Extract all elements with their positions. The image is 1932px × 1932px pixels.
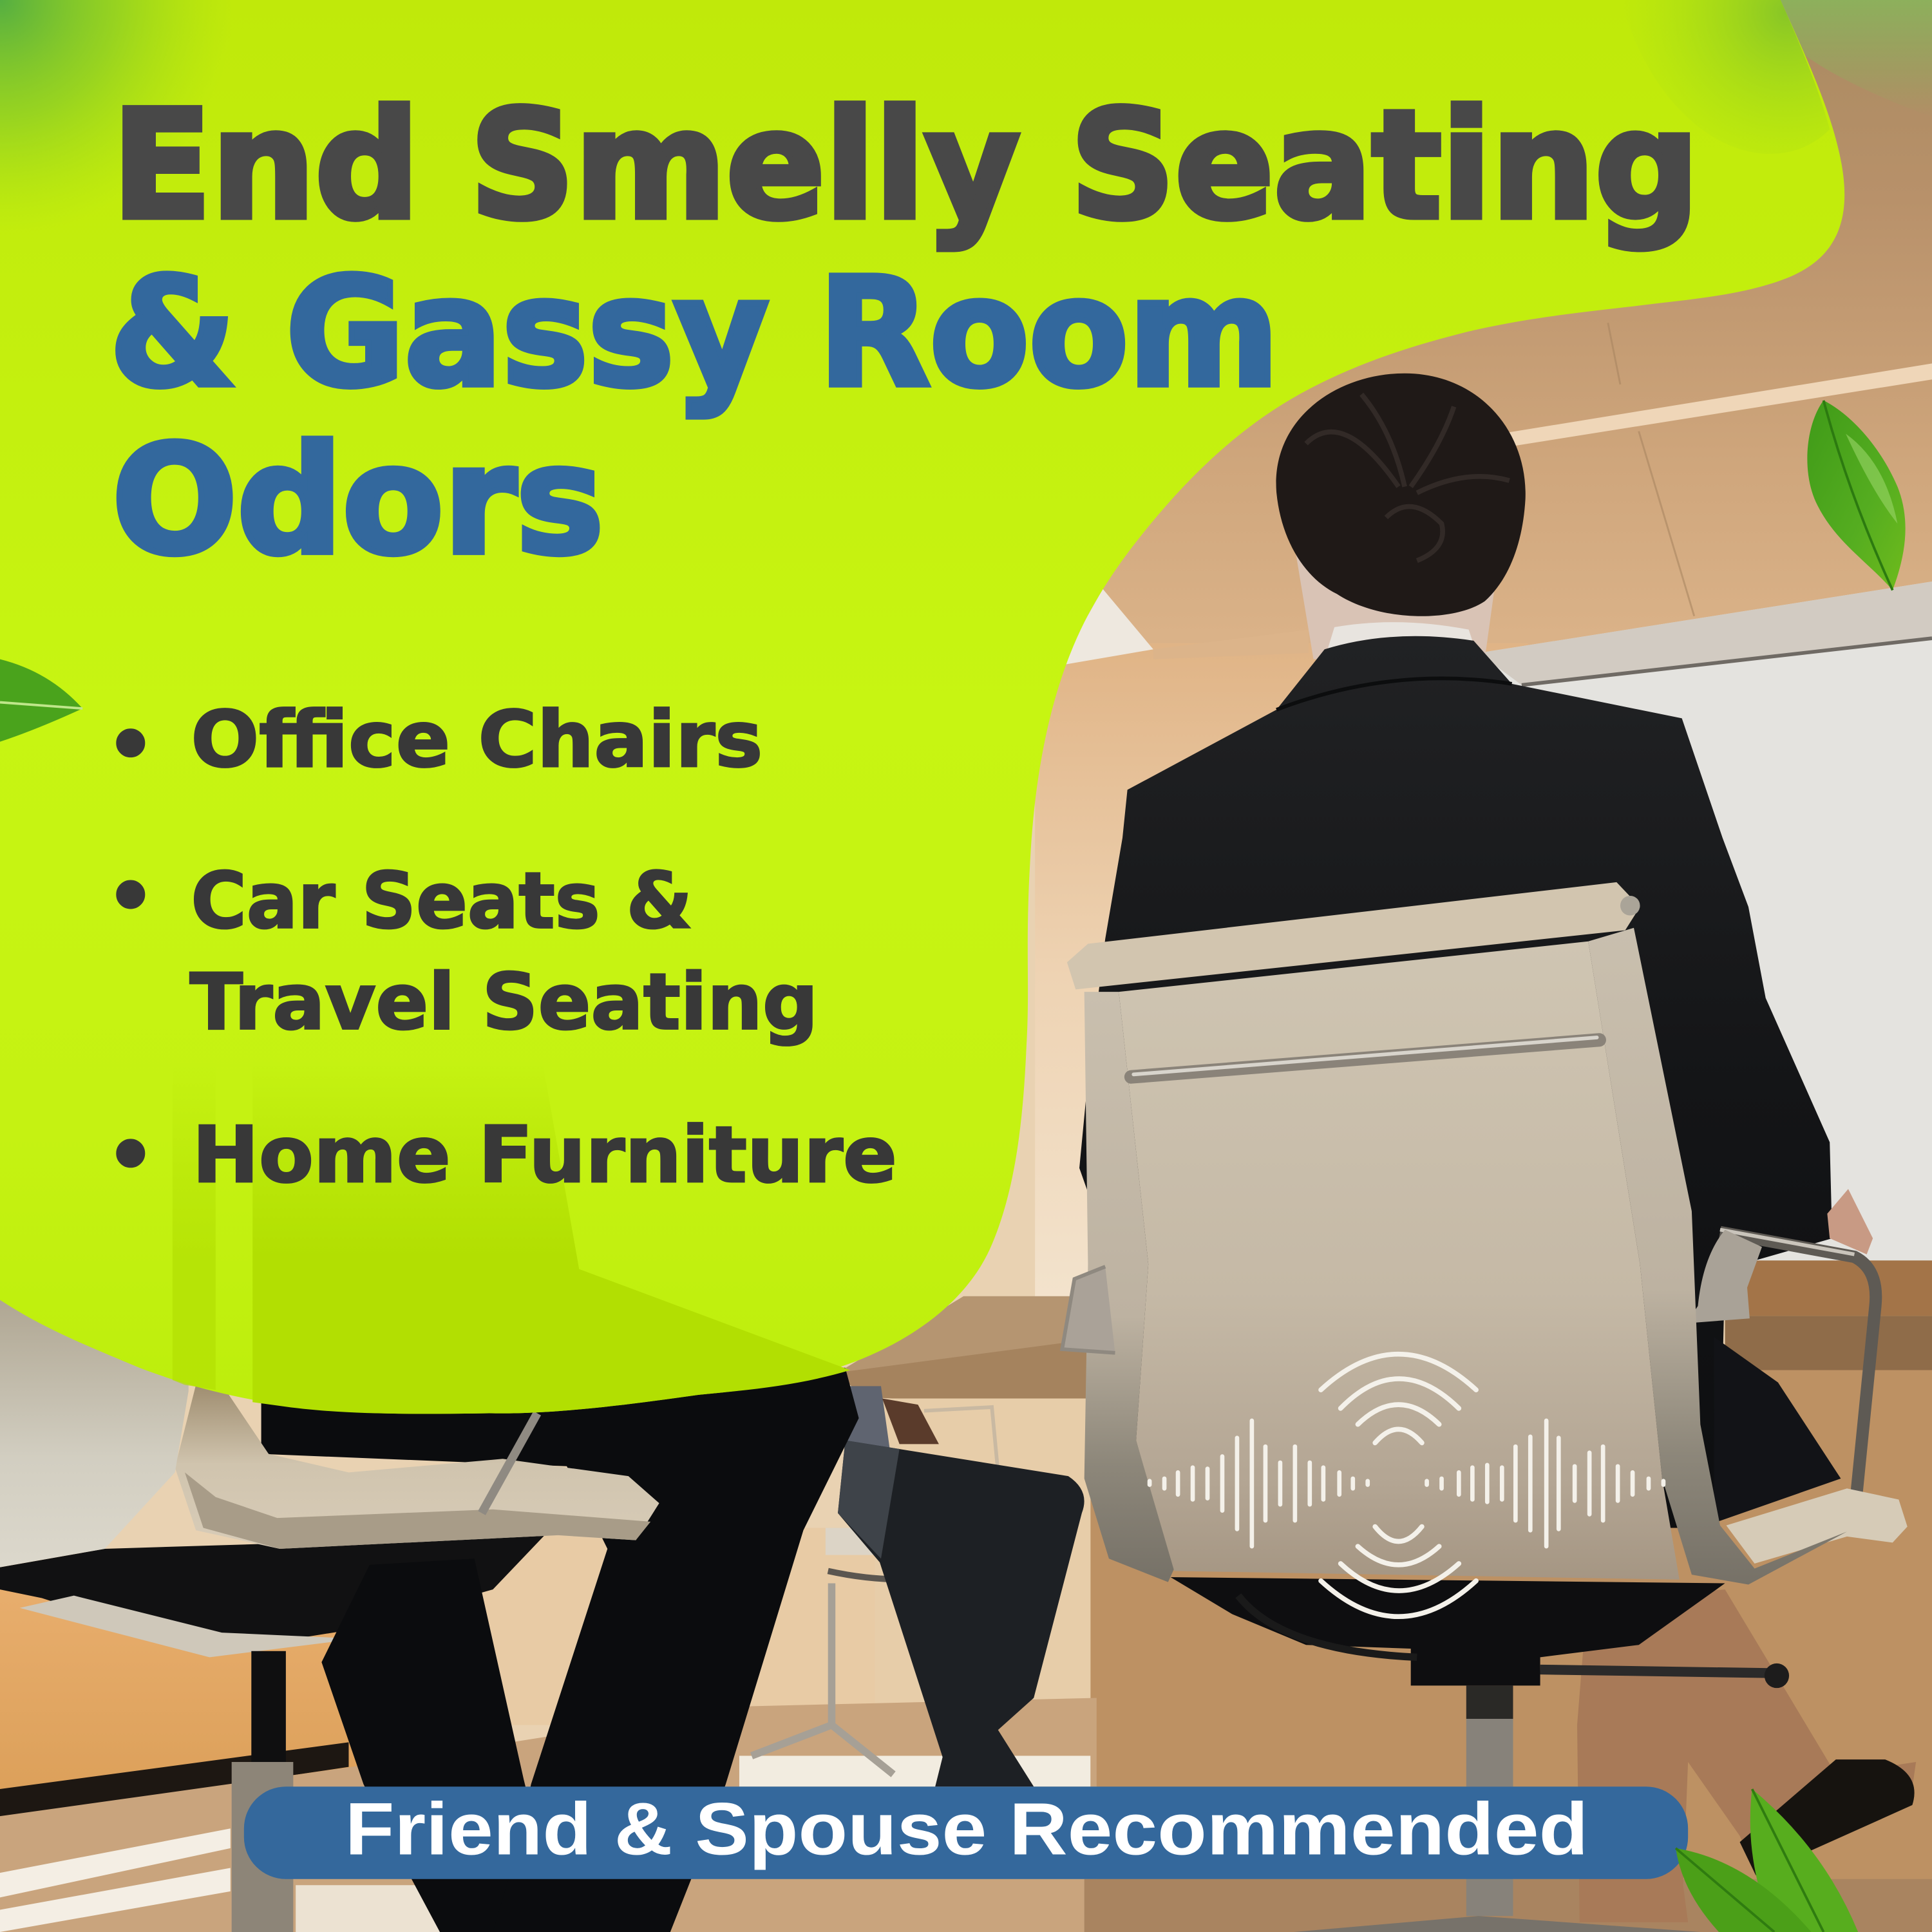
bulleted list: Home Furniture <box>192 1110 897 1200</box>
ghost silhouettes inside blob <box>252 1059 850 1414</box>
icon: leaves bottom right <box>1676 1789 1858 1932</box>
woman's collar <box>1325 622 1479 659</box>
bulleted list: Travel Seating <box>190 958 818 1048</box>
chair stem <box>1466 1685 1513 1719</box>
corner glow top left <box>0 0 234 234</box>
banner: Friend & Spouse Recommended: Friend & Spouse Recommended <box>345 1788 1588 1870</box>
left chair seat <box>175 1380 659 1549</box>
person's left leg <box>321 1558 554 1932</box>
title: & Gassy Room <box>109 246 1279 420</box>
office chair in foreground right <box>1062 882 1908 1932</box>
chair mechanism <box>1171 1577 1725 1685</box>
background seated man <box>752 1386 1084 1786</box>
lime green blob panel <box>0 0 1844 1414</box>
left chair back <box>0 1294 189 1567</box>
chair left frame <box>1084 992 1174 1582</box>
chair rod <box>482 1414 537 1513</box>
woman's jacket <box>1079 636 1832 1528</box>
person's right leg and torso <box>261 1368 859 1932</box>
right armrest <box>1720 1232 1876 1515</box>
woman's neck and ear <box>1293 533 1496 659</box>
chair right frame <box>1588 928 1847 1584</box>
chair metal cross bar <box>1131 1040 1599 1077</box>
chair top bar <box>1067 882 1640 989</box>
under-chair mechanism <box>0 1535 545 1653</box>
foreground left chair and seated legs <box>0 1294 859 1932</box>
bulleted list: Office Chairs <box>191 695 762 785</box>
chair seat <box>1726 1488 1908 1564</box>
woman's hand <box>1827 1189 1873 1255</box>
bulleted list: Car Seats & <box>191 857 692 947</box>
icon: leaf left edge <box>0 659 82 742</box>
woman's skirt <box>1714 1337 1841 1523</box>
chair back panel <box>1119 942 1680 1580</box>
title <box>109 79 1699 587</box>
woman's legs and shoe <box>1577 1589 1916 1922</box>
woman in black suit <box>1079 374 1916 1922</box>
bulleted list <box>117 695 897 1200</box>
title: Odors <box>112 413 603 587</box>
woman's hair <box>1276 374 1526 616</box>
icon: sound waves on chair <box>1150 1354 1663 1616</box>
icon: leaf top right <box>1807 401 1906 590</box>
title: End Smelly Seating <box>112 79 1699 252</box>
chair post <box>251 1651 286 1765</box>
corner glow top right <box>1620 0 1830 154</box>
left armrest <box>1062 1267 1115 1353</box>
ghost chair rail inside blob <box>173 1059 216 1390</box>
